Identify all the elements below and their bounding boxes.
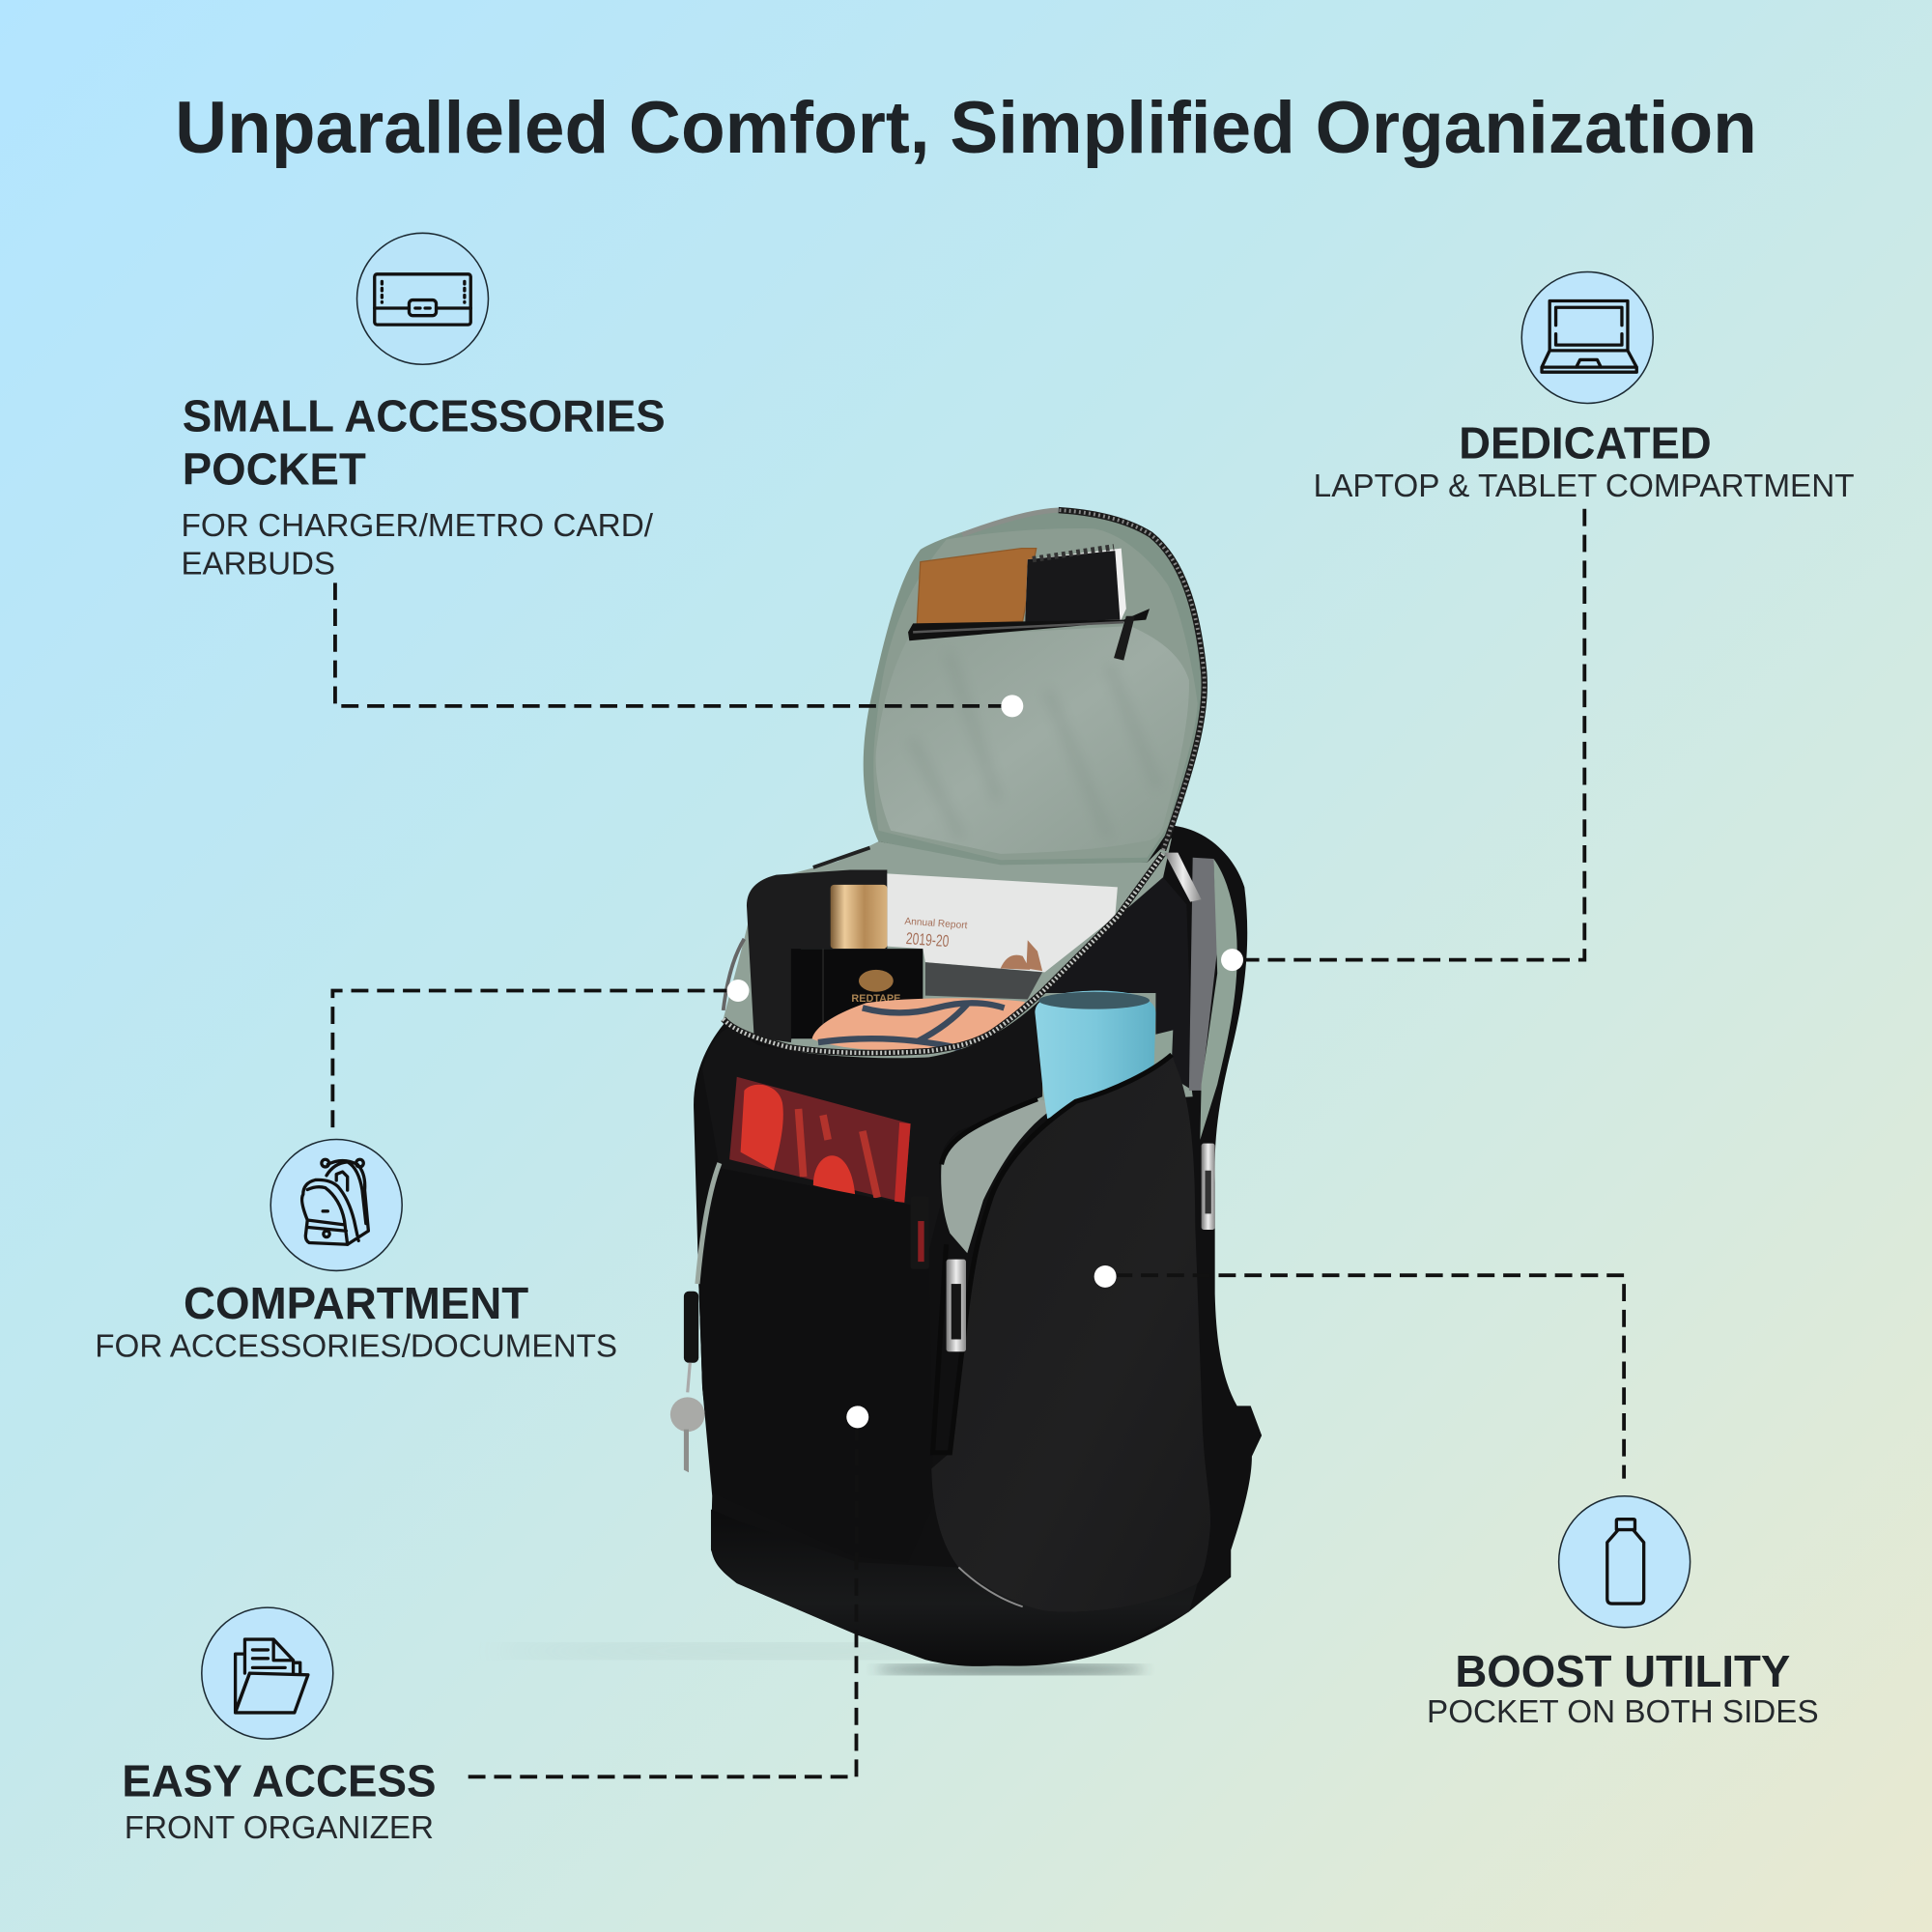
large side pocket panel — [931, 1055, 1210, 1612]
panel: easy access text — [122, 1756, 437, 1846]
side pocket zipper — [933, 1055, 1172, 1453]
key ring and keys — [670, 1292, 705, 1472]
connector: boost utility — [1094, 1265, 1624, 1479]
laptop — [1189, 858, 1217, 1091]
annual report book — [887, 873, 1118, 972]
side pocket lining — [941, 1099, 1060, 1253]
panel: compartment text: COMPARTMENT — [184, 1278, 528, 1328]
connector: easy access — [469, 1406, 868, 1776]
panel: small accessories text: EARBUDS — [182, 546, 335, 582]
panel: easy access text: FRONT ORGANIZER — [125, 1810, 434, 1846]
panel: dedicated text: DEDICATED — [1459, 417, 1712, 468]
panel: boost utility text — [1427, 1646, 1819, 1730]
mid body fabric — [702, 998, 1042, 1269]
ground shadow — [493, 1644, 1146, 1674]
icon: folder — [202, 1607, 333, 1739]
backpack body silhouette — [694, 826, 1262, 1666]
front organizer pocket — [697, 1163, 933, 1562]
tablet tray — [925, 962, 1042, 999]
panel: small accessories text: SMALL ACCESSORIES — [183, 390, 666, 440]
icon: wallet — [357, 233, 488, 364]
connector: laptop compartment — [1221, 509, 1584, 971]
main zipper — [724, 848, 1202, 1053]
leather base — [711, 1509, 1198, 1666]
book in front pocket — [729, 1077, 911, 1203]
panel: compartment text: FOR ACCESSORIES/DOCUMENTS — [95, 1328, 617, 1364]
lid outer trim and zipper — [864, 510, 1205, 865]
connector: small accessories pocket — [335, 582, 1023, 717]
notebook in lid pocket — [1025, 547, 1126, 622]
water bottle — [1035, 991, 1155, 1119]
connector: compartment — [332, 980, 750, 1127]
icon: laptop — [1521, 272, 1653, 403]
title: Unparalleled Comfort, Simplified Organization — [175, 87, 1757, 169]
backpack illustration — [493, 510, 1262, 1674]
icon: backpack — [270, 1139, 402, 1270]
red zip puller — [911, 1197, 929, 1269]
perfume bottle: REDTAPE — [851, 993, 900, 1005]
lid lining — [873, 528, 1198, 860]
wallet in lid pocket — [917, 549, 1037, 629]
lid pocket zipper — [908, 609, 1150, 661]
annual report book: Annual Report — [904, 917, 968, 931]
main compartment lining — [724, 838, 1193, 1109]
peach pouch — [812, 998, 1025, 1051]
organizer panel — [747, 870, 887, 1042]
panel: small accessories text — [182, 390, 666, 582]
right lining strip — [1200, 859, 1237, 1140]
perfume bottle — [791, 885, 923, 1038]
panel: easy access text: EASY ACCESS — [122, 1756, 437, 1806]
upper right black panel — [1042, 877, 1193, 1091]
panel: small accessories text: FOR CHARGER/METRO CARD/ — [182, 508, 654, 544]
zipper pullers — [947, 1144, 1215, 1351]
panel: boost utility text: BOOST UTILITY — [1455, 1646, 1790, 1696]
panel: boost utility text: POCKET ON BOTH SIDES — [1427, 1694, 1819, 1730]
panel: small accessories text: POCKET — [183, 443, 366, 494]
annual report book: 2019-20 — [905, 928, 950, 951]
panel: dedicated text — [1314, 417, 1855, 504]
panel: compartment text — [95, 1278, 617, 1364]
icon: bottle — [1559, 1496, 1690, 1628]
grey lining behind bottle — [1153, 1030, 1173, 1072]
panel: dedicated text: LAPTOP & TABLET COMPARTMENT — [1314, 469, 1855, 504]
